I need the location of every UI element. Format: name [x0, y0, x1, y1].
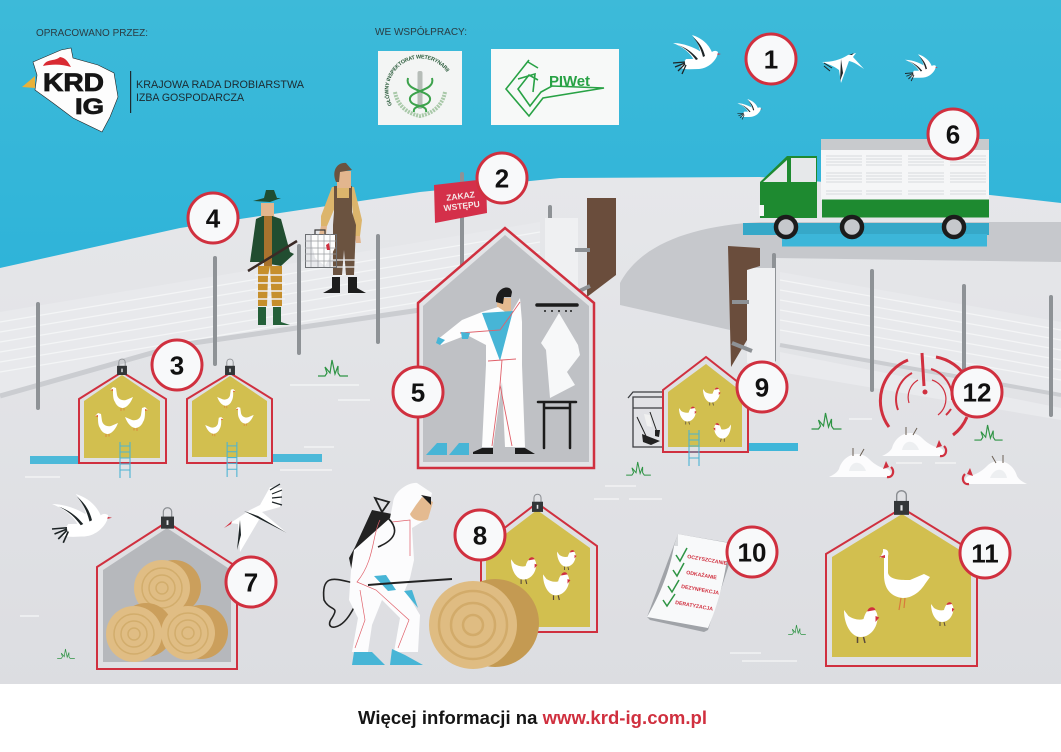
badge 2: 2	[495, 164, 509, 194]
stork left	[52, 494, 112, 543]
comb	[43, 57, 71, 67]
overalls	[333, 186, 356, 275]
footer text: Więcej informacji na www.krd-ig.com.pl	[358, 707, 707, 728]
rifle	[248, 241, 297, 271]
backpack tank	[349, 510, 392, 572]
checks	[663, 548, 687, 606]
dead bird centre	[882, 427, 946, 456]
logo: GIW: GŁÓWNY INSPEKTORAT WETERYNARII	[384, 54, 450, 106]
badge 11	[960, 528, 1010, 578]
sign: no entry	[434, 179, 487, 223]
shoulder strap	[378, 518, 395, 547]
truck	[759, 139, 989, 237]
worker in suit	[436, 287, 535, 454]
house 7: hay	[97, 508, 237, 669]
bin with tools	[628, 392, 663, 447]
badge 8	[455, 510, 505, 560]
badge 7	[226, 557, 276, 607]
large goose	[879, 549, 930, 610]
sign: no entry: ZAKAZ	[446, 189, 475, 203]
cargo box	[821, 139, 989, 150]
boots	[352, 649, 423, 665]
badge 3	[152, 340, 202, 390]
label: developed by: OPRACOWANO PRZEZ:	[36, 27, 148, 39]
dead bird right	[963, 455, 1027, 484]
water strip middle	[272, 454, 322, 462]
full name: IZBA GOSPODARCZA	[136, 92, 244, 104]
wheels	[776, 217, 796, 237]
badge 9	[737, 362, 787, 412]
footer strip	[0, 684, 1061, 752]
IG: IG	[75, 94, 104, 119]
logo: KRD-IG	[22, 27, 305, 132]
document: checklist	[647, 534, 733, 632]
stork right	[224, 484, 287, 552]
badge 7: 7	[244, 568, 258, 598]
checklist items: DERATYZACJA	[675, 600, 714, 613]
boots	[258, 307, 290, 325]
badge 4: 4	[206, 204, 221, 234]
birds flock	[673, 35, 938, 119]
bird 2	[822, 53, 864, 83]
alarm signal	[880, 353, 967, 435]
head	[337, 171, 351, 188]
bird 1	[673, 35, 721, 74]
white ground marks	[20, 385, 956, 661]
cab	[760, 156, 817, 218]
sprayer worker	[324, 483, 452, 665]
number badges	[152, 34, 1010, 607]
shirt	[321, 187, 362, 236]
road	[620, 222, 1061, 340]
trousers	[258, 266, 282, 306]
badge 10: 10	[738, 538, 766, 568]
left bale	[119, 603, 173, 657]
house 5: changing room	[418, 228, 594, 468]
badge 12: 12	[963, 378, 991, 408]
ground	[0, 177, 1061, 690]
left fence	[0, 174, 550, 408]
stool	[538, 402, 576, 448]
water strip right	[748, 443, 798, 451]
head	[261, 203, 274, 216]
truck bed	[822, 200, 989, 218]
hose	[324, 579, 369, 627]
water strip left	[30, 456, 80, 464]
storks	[52, 484, 287, 552]
badge 6	[928, 109, 978, 159]
partners label: WE WSPÓŁPRACY:	[375, 25, 467, 38]
badge 1	[746, 34, 796, 84]
house 3b: geese	[187, 359, 272, 477]
badge 1: 1	[764, 44, 778, 74]
badge 3: 3	[170, 350, 184, 380]
spray wand	[368, 579, 452, 585]
sign: no entry: WSTĘPU	[443, 199, 480, 213]
badge 8: 8	[473, 520, 487, 550]
bird 4	[737, 99, 763, 119]
badge 4	[188, 193, 238, 243]
Poland shape	[33, 48, 118, 132]
tank handle	[375, 498, 389, 512]
face	[410, 497, 433, 521]
checklist items: ODKAŻANIE	[686, 569, 718, 581]
farmer	[305, 163, 366, 293]
bird 3	[905, 54, 938, 81]
gloves	[374, 575, 418, 608]
badge 9: 9	[755, 372, 769, 402]
divider	[130, 71, 131, 113]
shoe covers	[426, 443, 469, 455]
house 8: chickens	[481, 494, 597, 632]
right fence	[774, 255, 1061, 420]
hat	[253, 190, 281, 202]
badge 12	[952, 367, 1002, 417]
dead birds	[829, 427, 1027, 484]
gate: upper	[545, 198, 616, 297]
shower head	[537, 303, 577, 307]
logo: PIWet: PIWet	[549, 73, 590, 90]
boots	[323, 277, 366, 293]
house 3a: geese	[79, 359, 166, 478]
grass tufts	[57, 360, 1003, 658]
hunter	[248, 190, 297, 325]
house 9: chickens and tools	[628, 357, 748, 466]
badge 5: 5	[411, 378, 425, 408]
badge 5	[393, 367, 443, 417]
truck pads	[743, 223, 989, 246]
logo: GIW	[378, 51, 462, 125]
checklist items: OCZYSZCZANIE	[687, 554, 728, 567]
hands	[319, 226, 361, 243]
sky background	[0, 0, 1061, 300]
house 11: poultry	[826, 491, 977, 666]
top bale	[147, 560, 201, 614]
hanging suit	[541, 313, 580, 398]
badge 6: 6	[946, 120, 960, 150]
badge 11: 11	[971, 538, 999, 568]
full name: KRAJOWA RADA DROBIARSTWA	[136, 79, 305, 91]
badge 2	[477, 153, 527, 203]
KRD: KRD	[43, 69, 104, 97]
cage with chicken	[305, 230, 336, 268]
beak	[22, 76, 35, 88]
gate: lower	[728, 246, 775, 367]
dead bird left	[829, 448, 893, 477]
suit	[349, 483, 432, 652]
logo: PIWet	[491, 49, 619, 125]
jacket	[250, 214, 294, 266]
checklist items	[675, 554, 728, 613]
checklist items: DEZYNFEKCJA	[681, 584, 720, 597]
right bale	[174, 605, 228, 659]
badge 10	[727, 527, 777, 577]
hay bale	[429, 579, 539, 669]
